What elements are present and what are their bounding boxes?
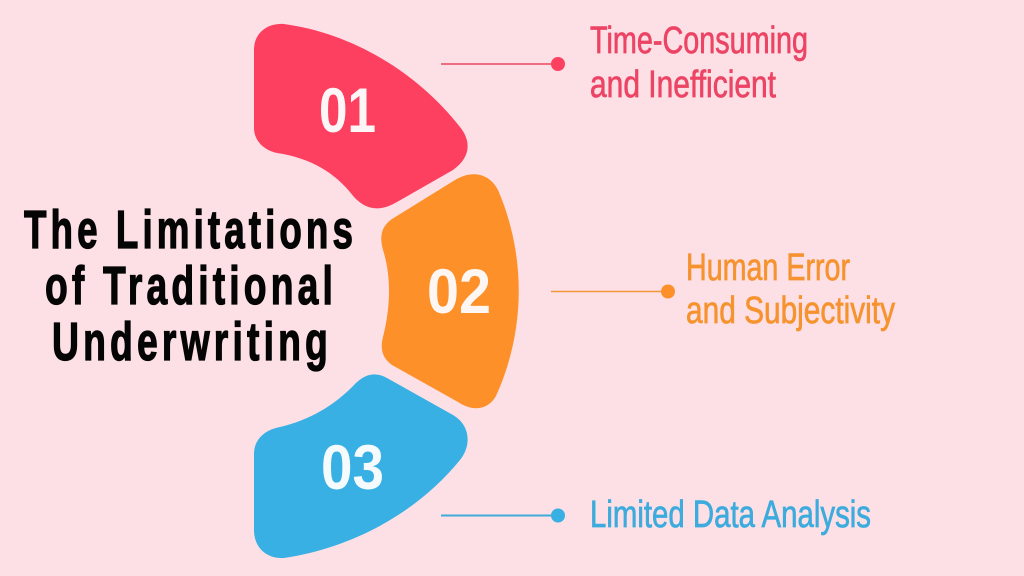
- title: Underwriting: [52, 312, 332, 372]
- segment 02: [381, 174, 519, 408]
- title: [24, 200, 357, 372]
- label 01: and Inefficient: [590, 64, 776, 106]
- segment 03: [254, 374, 468, 558]
- segment 03: 03: [321, 433, 384, 503]
- label 02: [686, 247, 895, 332]
- title: The Limitations: [24, 200, 357, 260]
- segment 01: [254, 24, 468, 208]
- segment 01: 01: [319, 76, 376, 146]
- label 01: [590, 20, 808, 106]
- connector 01: [441, 57, 565, 71]
- connector 02: [551, 284, 675, 298]
- title: of Traditional: [45, 256, 337, 316]
- label 02: and Subjectivity: [686, 290, 895, 332]
- label 02: Human Error: [686, 247, 850, 289]
- label 03: Limited Data Analysis: [590, 494, 871, 536]
- segment 02: 02: [427, 257, 491, 327]
- connector 03: [441, 508, 565, 522]
- label 01: Time-Consuming: [590, 20, 808, 62]
